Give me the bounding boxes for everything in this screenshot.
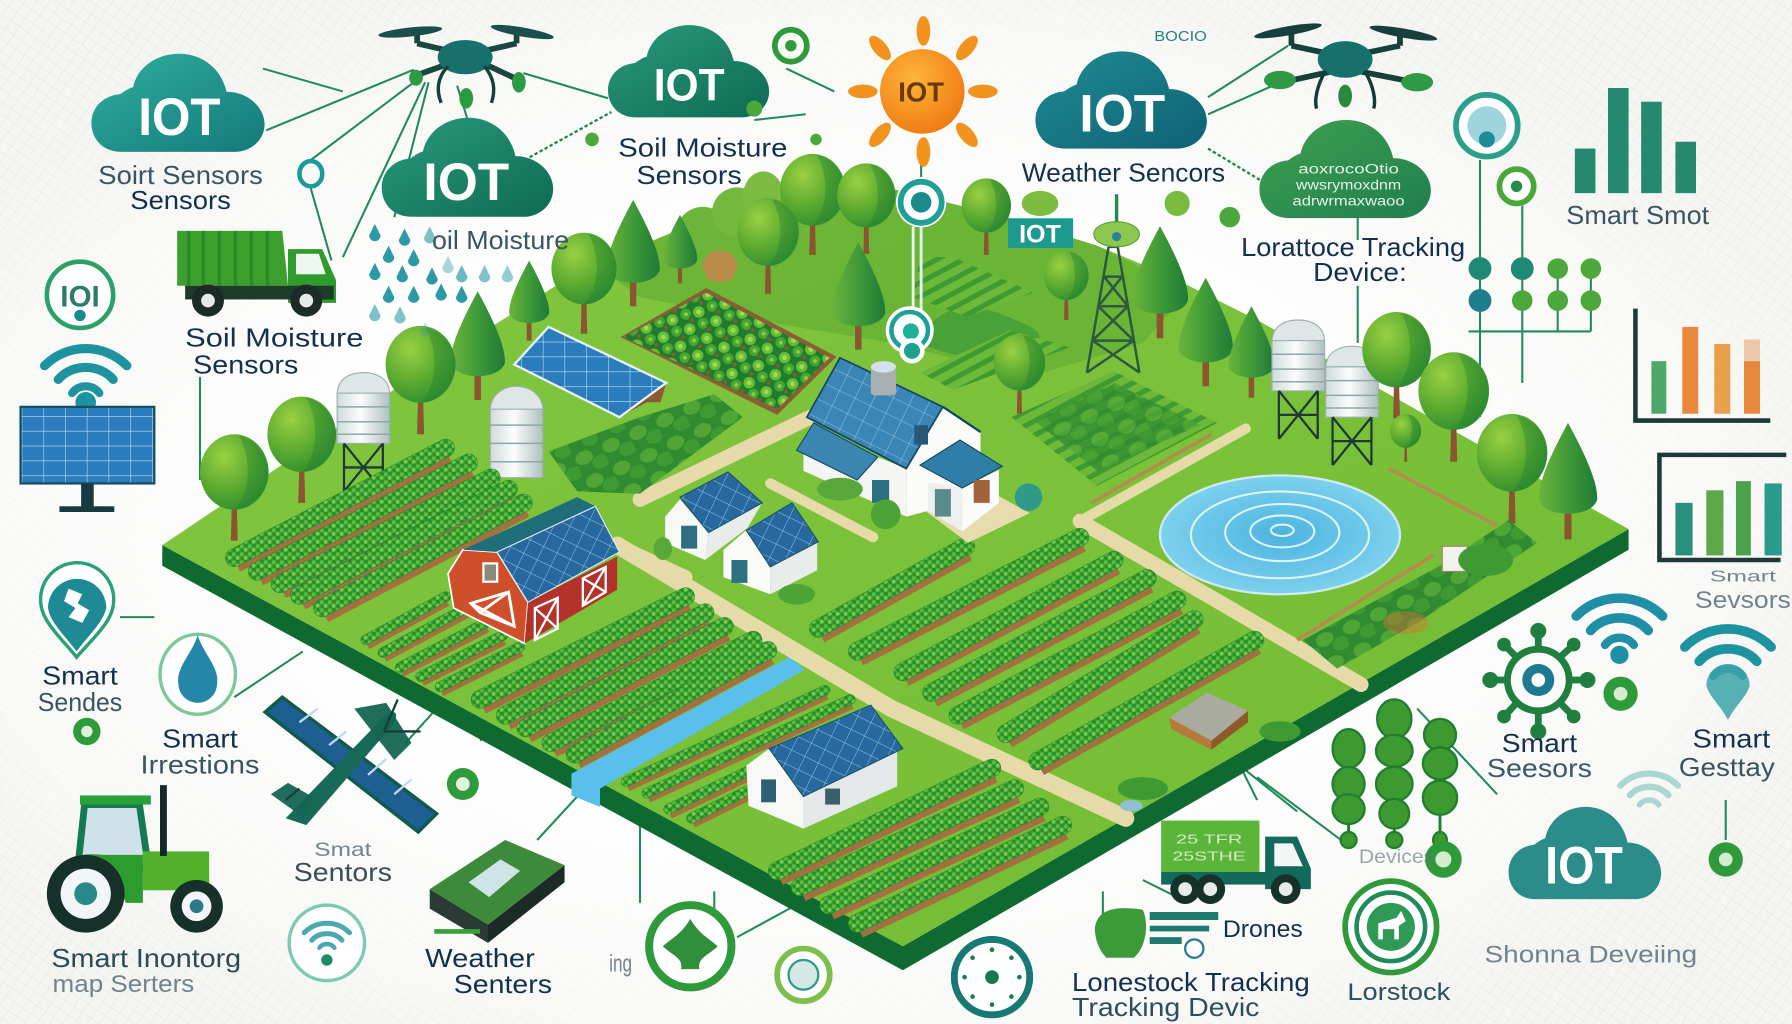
label: smart inontorg: Smart Inontorg (51, 943, 241, 973)
icon: gateway box (430, 840, 565, 943)
icon: faint wifi (1620, 774, 1678, 805)
label: soil moisture left (185, 322, 363, 380)
back hill fields (913, 257, 1217, 486)
cloud: garbled data (1259, 120, 1431, 218)
label: smart seesors: Smart (1502, 728, 1578, 758)
label: soil moisture top (618, 133, 787, 190)
left trees (200, 291, 505, 541)
icon: ring sensor (47, 262, 113, 328)
cloud: garbled data: wwsrymoxdnm (1295, 178, 1401, 193)
cloud: weather (1035, 51, 1207, 149)
label: weather senters (425, 943, 552, 999)
label: smart inontorg (51, 943, 241, 998)
icon: gear sensor (1482, 623, 1595, 739)
farm platform (162, 177, 1629, 970)
icon: water drop ring (160, 634, 235, 714)
truck: bottom: 25STHE (1173, 850, 1246, 864)
icon: solar panel (21, 407, 154, 512)
IOT sign (1008, 218, 1073, 248)
label: tracking device (1241, 232, 1465, 287)
bar chart: top right (1575, 88, 1696, 193)
label: soil sensors: Soirt Sensors (98, 160, 263, 190)
icon: livestock ring (1345, 881, 1437, 973)
crop rows: left field (234, 448, 526, 615)
icon: wifi right (1576, 598, 1663, 664)
label: tracking device: Device: (1313, 257, 1407, 287)
cloud: middle: IOT (423, 153, 509, 212)
IOT sign: IOT (1019, 220, 1062, 248)
small sensor rings: top (299, 30, 1240, 227)
label: lonestock tracking: Lonestock Tracking (1072, 967, 1310, 997)
cloud: weather: IOT (1079, 84, 1165, 143)
label: smart irrestions (141, 723, 259, 780)
label: drones: Drones (1223, 916, 1303, 943)
silos left (337, 373, 543, 491)
label: small code: BOCIO (1154, 29, 1207, 45)
hillside trees (509, 154, 1274, 414)
label: weather senters: Senters (454, 969, 552, 999)
cloud: garbled data: adrwrmaxwaoo (1293, 194, 1405, 209)
label: smart sendes: Smart (42, 661, 118, 691)
label: weather senters: Weather (425, 943, 535, 973)
solar array (514, 327, 666, 417)
icon: clock (954, 939, 1030, 1015)
label: smart smot: Smart Smot (1566, 200, 1710, 230)
dirt roads (617, 417, 1361, 818)
icon: wifi pin (1685, 629, 1771, 720)
cloud: middle (382, 118, 553, 217)
cloud: top centre: IOT (654, 60, 725, 111)
icon: tractor (47, 785, 223, 933)
silos and trees right (1272, 312, 1597, 539)
label: tracking device: Lorattoce Tracking (1241, 232, 1465, 262)
chain of sensor dots (1469, 257, 1601, 312)
icon: small green sensors (447, 677, 1743, 878)
pond (1160, 475, 1400, 594)
connector lines (120, 46, 1726, 937)
crop rows: bottom fields (626, 690, 1065, 930)
label: weather sensors: Weather Sencors (1022, 158, 1225, 188)
main farmhouse (797, 358, 1042, 543)
crop rows: barn field (366, 597, 521, 691)
leafy patch: upper left (621, 288, 837, 415)
icon: wifi ring (289, 905, 365, 981)
label: smart inontorg: map Serters (53, 971, 194, 998)
shed and shrubs (1118, 693, 1301, 811)
label: sevsors: Sevsors (1695, 587, 1791, 614)
label: soil moisture top: Sensors (637, 160, 742, 190)
label: devices: Devices (1359, 846, 1434, 868)
label: smart gesttay (1679, 723, 1776, 782)
label: smart sendes: Sendes (38, 687, 122, 717)
label: smart gesttay: Smart (1693, 723, 1771, 753)
cloud: garbled data: aoxrocoOtio (1298, 162, 1399, 177)
icon: tracking tag (1095, 908, 1218, 958)
label: smart sendes (38, 661, 122, 717)
crop rows: east field (818, 537, 1257, 768)
sun: IOT (898, 77, 944, 108)
label: smart irrestions: Irrestions (141, 750, 259, 780)
label: sevsors (1695, 569, 1791, 614)
label: soil moisture top: Soil Moisture (618, 133, 787, 163)
weather tower (1087, 194, 1139, 373)
label: smart seesors: Seesors (1487, 753, 1592, 783)
label: soil sensors: Sensors (130, 185, 231, 215)
label: smart irrestions: Smart (162, 723, 238, 753)
icon: check ring (777, 949, 830, 1001)
icon: small ring (73, 718, 101, 745)
barn (448, 497, 619, 643)
icon: plant columns (1333, 699, 1457, 848)
fenced garden (1091, 434, 1537, 669)
cloud: bottom right (1509, 807, 1661, 899)
sun (848, 16, 998, 167)
label: smart sentors: Smat (314, 839, 372, 861)
cloud: bottom right: IOT (1545, 836, 1623, 895)
bar chart: orange and green (1635, 309, 1770, 421)
icon: ring sensor: IOI (60, 280, 100, 313)
label: smart sentors: Sentors (294, 857, 392, 887)
icon: sensor ring right (1456, 95, 1534, 203)
small houses (654, 472, 818, 605)
icon: leaf ring (649, 905, 731, 987)
truck: top left (177, 231, 336, 317)
label: lonestock tracking: Tracking Devic (1072, 992, 1259, 1022)
icon: wifi left (45, 349, 127, 413)
label: shonna deveiing: Shonna Deveiing (1485, 941, 1697, 968)
icon: location pin (41, 563, 114, 657)
truck: bottom: 25 TFR (1176, 832, 1242, 846)
stream (571, 657, 805, 807)
label: smart seesors (1487, 728, 1592, 783)
cloud: top left: IOT (138, 88, 221, 147)
label: soil moisture left: Sensors (193, 350, 298, 380)
drone: left (378, 22, 555, 109)
drone: right (1253, 20, 1438, 109)
water drops (369, 224, 513, 336)
cloud: top centre (608, 25, 769, 117)
leafy patch: by silo (549, 394, 743, 494)
label: lorstock: Lorstock (1347, 979, 1451, 1006)
label: smart sentors (294, 839, 392, 887)
bar chart: lower right (1659, 455, 1786, 560)
truck: bottom (1161, 821, 1311, 904)
label: sevsors: Smart (1710, 569, 1777, 586)
crop rows: centre field (480, 597, 770, 761)
sensor pins on the hill (886, 177, 946, 363)
label: smart gesttay: Gesttay (1679, 752, 1776, 782)
label: soil moisture left: Soil Moisture (185, 322, 363, 352)
icon: solar plane (265, 697, 437, 832)
label: ing fragment: ing (609, 950, 632, 977)
bottom house (746, 705, 903, 829)
label: moisture drops: oil Moisture (432, 225, 569, 255)
cloud: top left (91, 54, 265, 152)
label: soil sensors (98, 160, 263, 215)
label: lonestock tracking (1072, 967, 1310, 1022)
